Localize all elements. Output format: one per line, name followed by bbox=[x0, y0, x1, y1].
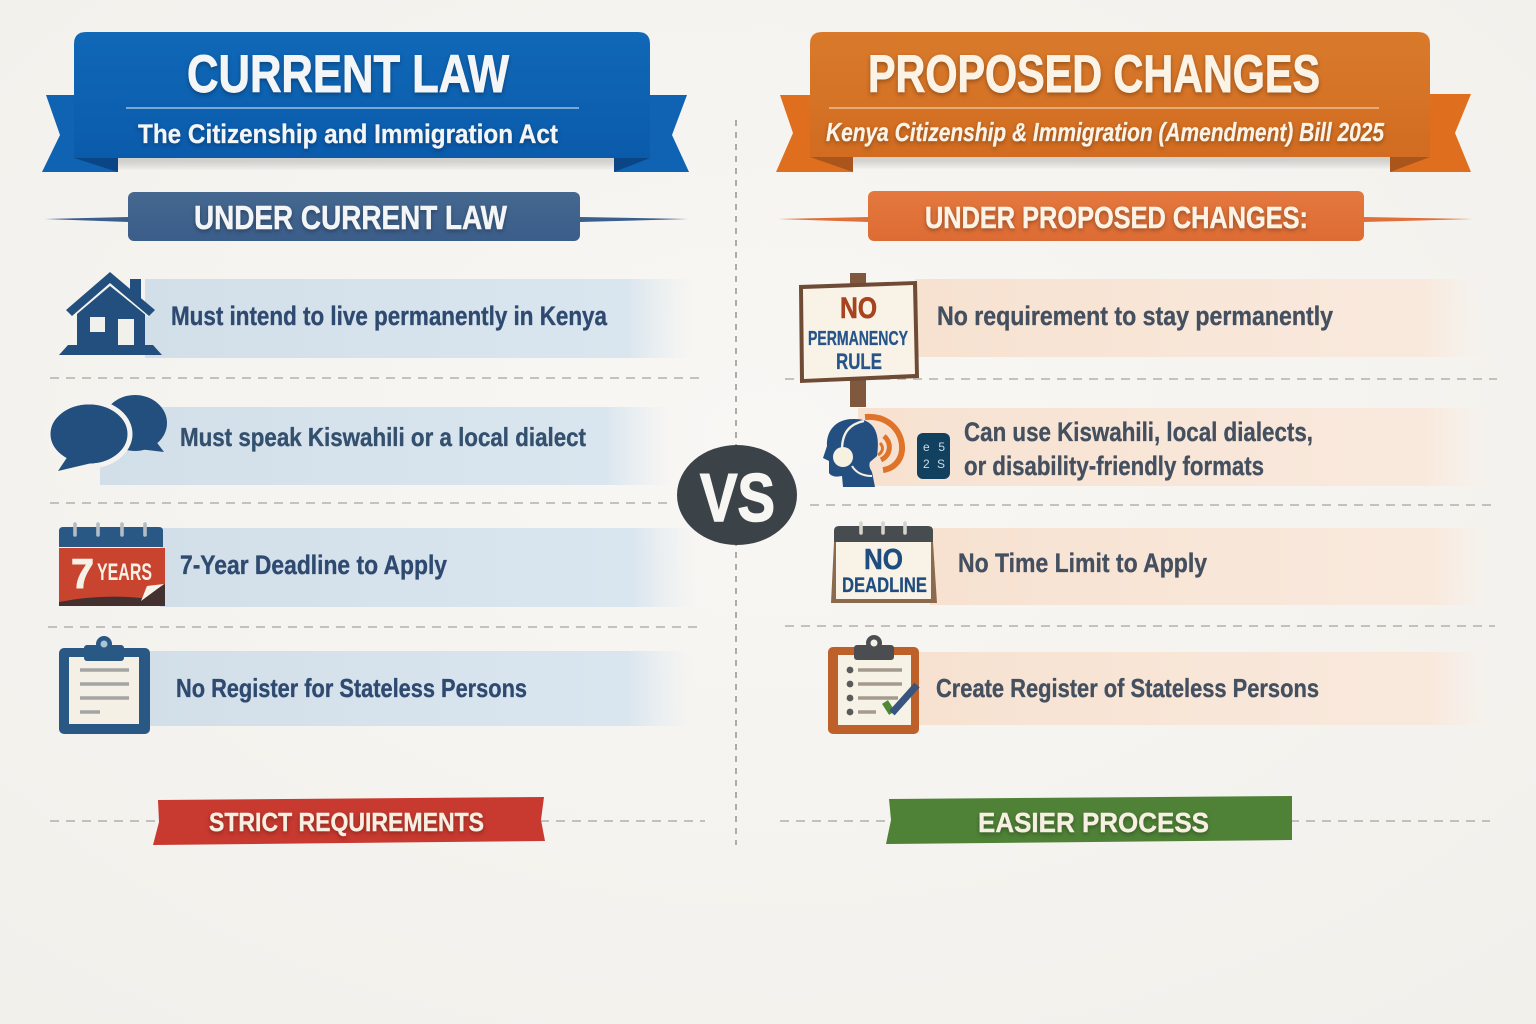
badge: strict requirements: STRICT REQUIREMENTS bbox=[209, 807, 484, 837]
ribbon tail left bbox=[42, 95, 118, 172]
ribbon tail right bbox=[1390, 94, 1471, 172]
badge: easier process bbox=[886, 796, 1292, 844]
panel: current law header ribbon bbox=[42, 32, 689, 172]
title: CURRENT LAW bbox=[187, 45, 509, 104]
icon: accessible format tablet bbox=[917, 433, 950, 479]
ribbon tail left bbox=[776, 95, 853, 172]
icon: 7 years calendar: YEARS bbox=[97, 559, 152, 586]
icon: no permanency sign bbox=[799, 273, 919, 407]
icon: no deadline calendar bbox=[831, 523, 937, 603]
heading: under proposed changes: UNDER PROPOSED CHANGES: bbox=[925, 200, 1308, 235]
VS badge bbox=[677, 445, 797, 545]
icon: clipboard with check bbox=[828, 635, 919, 734]
panel: proposed changes header ribbon bbox=[776, 32, 1471, 172]
icon: 7 years calendar: 7 bbox=[71, 550, 94, 597]
subtitle: Kenya Citizenship & Immigration (Amendment) Bill 2025 bbox=[826, 117, 1384, 147]
heading: under current law: UNDER CURRENT LAW bbox=[194, 199, 508, 236]
row: no time limit bbox=[831, 523, 1490, 605]
icon: no deadline calendar: NO bbox=[864, 544, 903, 576]
badge: strict requirements bbox=[153, 797, 545, 845]
text: Must speak Kiswahili or a local dialect bbox=[180, 422, 586, 452]
row: can use kiswahili: or disability-friendly formats bbox=[964, 451, 1264, 481]
icon: accessible format tablet: 2 S bbox=[923, 457, 945, 471]
row: must intend to live permanently bbox=[59, 272, 695, 358]
text: 7-Year Deadline to Apply bbox=[180, 550, 447, 580]
icon: clipboard bbox=[59, 636, 150, 734]
icon: no permanency sign: NO bbox=[840, 292, 877, 325]
icon: speech bubbles bbox=[48, 395, 167, 471]
text: No Register for Stateless Persons bbox=[176, 673, 527, 703]
title: PROPOSED CHANGES bbox=[868, 45, 1320, 104]
row: 7-year deadline bbox=[59, 524, 698, 607]
icon: no permanency sign: RULE bbox=[836, 349, 882, 374]
icon: house bbox=[59, 272, 162, 355]
text: No Time Limit to Apply bbox=[958, 548, 1207, 578]
subtitle: The Citizenship and Immigration Act bbox=[138, 119, 558, 149]
text: Create Register of Stateless Persons bbox=[936, 673, 1319, 703]
heading: under proposed changes bbox=[778, 191, 1473, 241]
badge: easier process: EASIER PROCESS bbox=[978, 807, 1209, 838]
ribbon tail right bbox=[614, 95, 689, 172]
row: create register bbox=[828, 635, 1490, 734]
row: no register bbox=[59, 636, 695, 734]
icon: headset head bbox=[823, 417, 902, 487]
center divider bbox=[735, 120, 737, 845]
text: Can use Kiswahili, local dialects, bbox=[964, 417, 1313, 447]
row: no requirement to stay bbox=[799, 273, 1482, 407]
icon: accessible format tablet: e 5 bbox=[923, 440, 945, 454]
row dividers bbox=[48, 378, 1497, 821]
VS badge: VS bbox=[700, 460, 775, 536]
text: Must intend to live permanently in Kenya bbox=[171, 301, 608, 331]
row: must speak kiswahili bbox=[48, 395, 675, 485]
icon: 7 years calendar bbox=[59, 524, 165, 606]
icon: no permanency sign: PERMANENCY bbox=[808, 328, 908, 350]
text: No requirement to stay permanently bbox=[937, 301, 1333, 331]
row: can use kiswahili bbox=[823, 408, 1490, 487]
heading: under current law bbox=[45, 192, 688, 241]
icon: no deadline calendar: DEADLINE bbox=[842, 574, 927, 597]
